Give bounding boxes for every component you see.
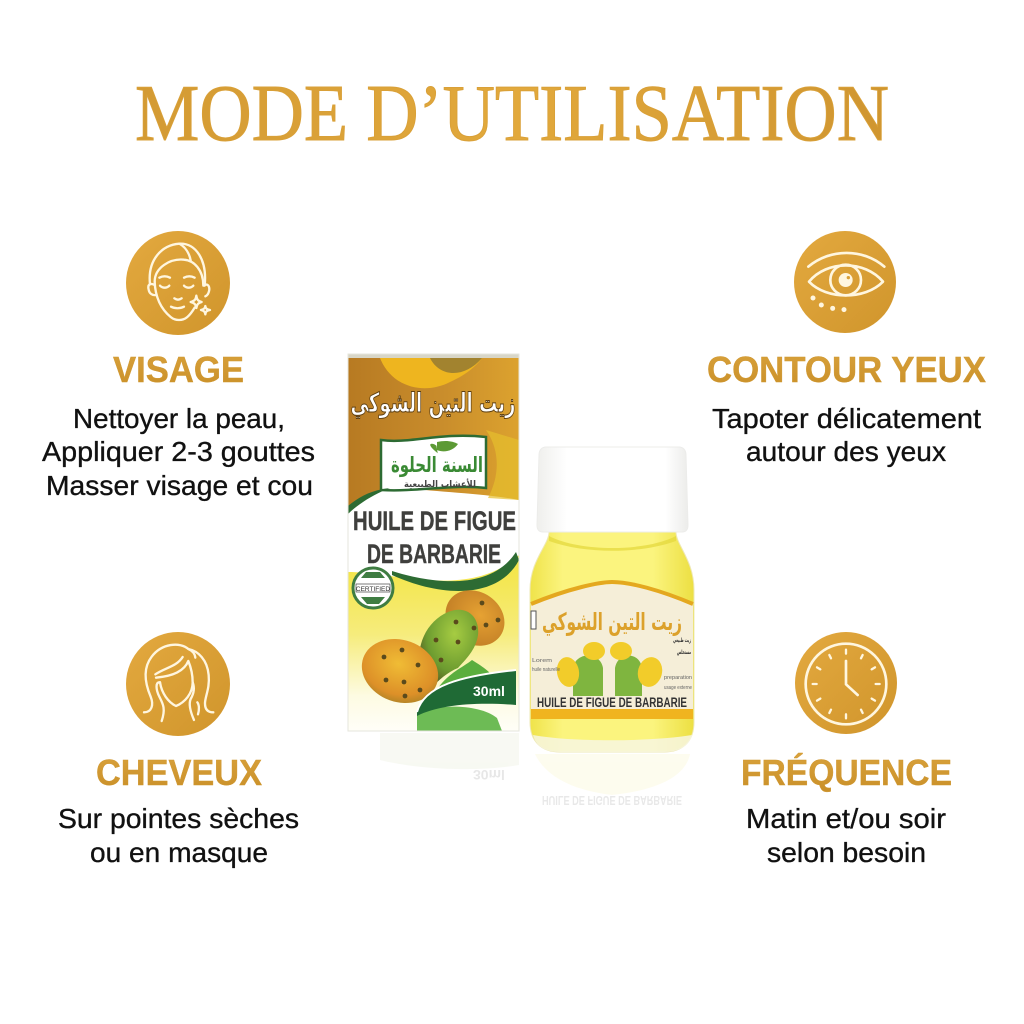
- text: cheveux instructions: [58, 803, 299, 868]
- box arabic title: زيت التين الشوكي: [350, 388, 516, 419]
- heading: contour yeux: CONTOUR YEUX: [707, 349, 986, 390]
- heading: visage: VISAGE: [113, 349, 244, 390]
- panel: visage: [42, 231, 315, 501]
- box product name: HUILE DE FIGUE: [353, 506, 516, 536]
- text: contour yeux instructions: autour des yeux: [746, 436, 946, 467]
- label cactus pair: [555, 642, 665, 696]
- label fine print: [532, 637, 692, 691]
- text: frequence instructions: selon besoin: [767, 837, 926, 868]
- label fine print: usage externe: [664, 685, 692, 691]
- box badge: [353, 568, 393, 608]
- box product name: DE BARBARIE: [367, 539, 501, 569]
- heading: frequence: FRÉQUENCE: [741, 752, 952, 793]
- bottle label: [531, 582, 693, 719]
- bottle cap: [537, 447, 688, 532]
- box product name: [353, 506, 516, 569]
- label product name: HUILE DE FIGUE DE BARBARIE: [537, 695, 687, 710]
- product: box: [348, 354, 519, 731]
- product: box reflection: 30ml: [473, 767, 505, 783]
- label fine print: زيت طبيعي: [673, 637, 691, 644]
- product: bottle reflection: HUILE DE FIGUE DE BARBARIE: [542, 793, 682, 808]
- heading: cheveux: CHEVEUX: [96, 752, 262, 793]
- label fine print: huile naturelle: [532, 667, 560, 673]
- text: frequence instructions: Matin et/ou soir: [746, 803, 946, 834]
- panel: cheveux: [58, 632, 299, 868]
- box fruit: [353, 579, 515, 713]
- panel: frequence: [741, 632, 952, 868]
- text: cheveux instructions: Sur pointes sèches: [58, 803, 299, 834]
- icon: eye: [794, 231, 896, 333]
- box lower panel: [348, 555, 519, 731]
- box 30ml band: 30ml: [473, 683, 505, 699]
- label fine print: مستخلص: [677, 649, 691, 656]
- text: visage instructions: Masser visage et cou: [46, 470, 313, 501]
- text: cheveux instructions: ou en masque: [90, 837, 268, 868]
- icon: hair: [126, 632, 230, 736]
- text: contour yeux instructions: [712, 403, 981, 467]
- bottle glass: [530, 532, 694, 752]
- box logo: [381, 436, 486, 490]
- label fine print: Lorem: [532, 658, 553, 664]
- label fine print: preparation: [664, 675, 692, 681]
- title: MODE D’UTILISATION: [135, 70, 889, 158]
- product: bottle: [530, 447, 694, 752]
- box badge: CERTIFIED: [356, 586, 390, 593]
- bottle label: زيت التين الشوكي: [542, 608, 682, 636]
- text: visage instructions: Nettoyer la peau,: [73, 403, 285, 434]
- box top panel: [348, 358, 519, 508]
- box white band curve: [348, 488, 390, 514]
- text: visage instructions: Appliquer 2-3 gouttes: [42, 436, 315, 467]
- panel: contour yeux: [707, 231, 986, 467]
- product: box reflection: [380, 733, 519, 783]
- text: frequence instructions: [746, 803, 946, 868]
- box logo: السنة الحلوة: [391, 453, 483, 477]
- box 30ml band: [417, 670, 516, 731]
- box logo: للأعشاب الطبيعية: [404, 478, 476, 490]
- text: contour yeux instructions: Tapoter délicatement: [712, 403, 981, 434]
- text: visage instructions: [42, 403, 315, 501]
- icon: face: [126, 231, 230, 335]
- product: bottle reflection: [535, 754, 690, 808]
- icon: clock: [795, 632, 897, 734]
